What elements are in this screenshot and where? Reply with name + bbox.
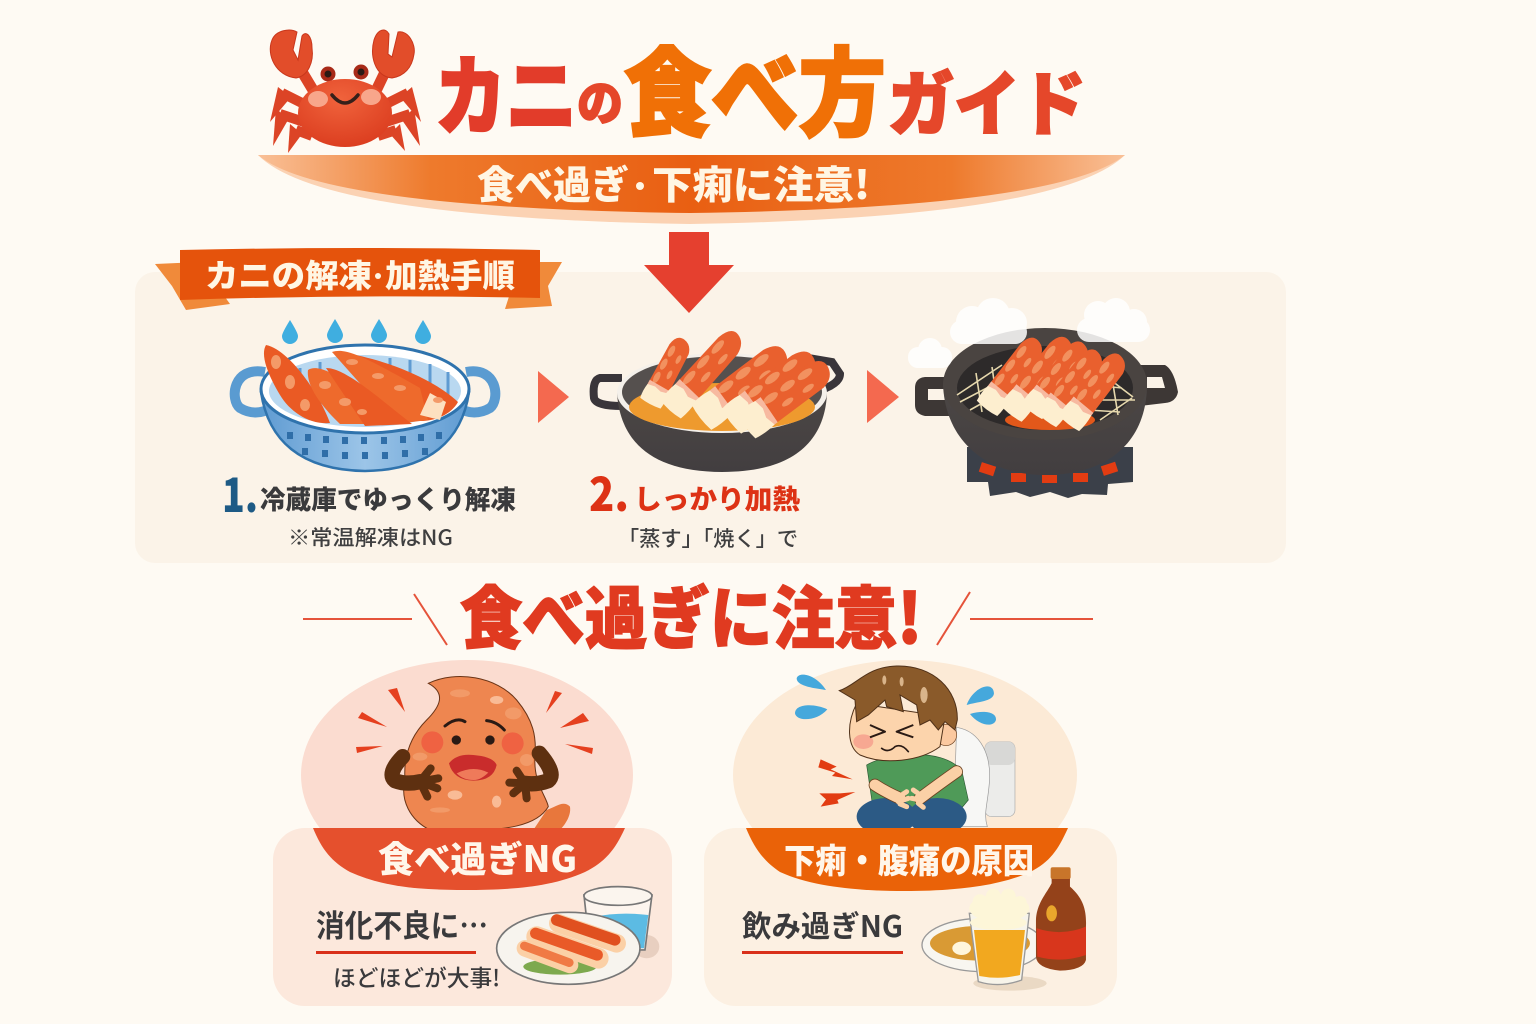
icon: grill on burner with steam: [908, 298, 1178, 498]
steam: [908, 298, 1150, 368]
overdrinking text: 飲み過ぎNG: [742, 902, 903, 946]
icon: crab mascot: [270, 30, 421, 153]
arms and hands: [392, 753, 551, 798]
card: [704, 828, 1117, 1006]
arrow: step 2 to 3: [867, 370, 899, 423]
red band: [313, 828, 625, 890]
ribbon text: カニの解凍: [205, 251, 372, 297]
band text: 食べ過ぎNG: [378, 831, 577, 883]
icon: surprise lines: [356, 688, 593, 754]
icon: sick crab character: [392, 677, 570, 830]
underline: [316, 951, 476, 954]
section heading: overeating warning: 食べ過ぎに注意!: [460, 564, 922, 663]
card: [273, 828, 672, 1006]
moderation text: ほどほどが大事!: [333, 959, 500, 993]
panel: diarrhea and stomach ache: [704, 660, 1117, 1006]
banner text: 下痢に注意!: [652, 155, 870, 211]
step 2 label: しっかり加熱: [634, 478, 800, 517]
step 2 label: [589, 459, 800, 525]
step 1 note: ※常温解凍はNG: [288, 522, 453, 552]
arrow: down: [644, 232, 734, 313]
panel: thawing and heating steps: [135, 272, 1286, 563]
circle backdrop: [301, 660, 633, 890]
arrow: step 1 to 2: [538, 371, 569, 423]
ribbon text: [205, 251, 515, 297]
title: [435, 17, 1086, 156]
indigestion text: 消化不良に…: [316, 901, 488, 946]
ribbon text: 加熱手順: [385, 251, 515, 297]
title: ガイド: [888, 49, 1086, 150]
icon: pot with crab legs: [594, 325, 840, 472]
step 1 label: 1.: [222, 460, 258, 526]
icon: colander with crab legs: [235, 345, 495, 471]
circle backdrop: [733, 660, 1077, 890]
step 2 note: 「蒸す」「焼く」で: [618, 523, 798, 553]
section heading: overeating warning: [303, 564, 1093, 663]
icon: beer, bottle and plate: [922, 867, 1086, 991]
panel: overeating: [273, 660, 672, 1006]
title: の: [577, 64, 623, 134]
step 1 label: 冷蔵庫でゆっくり解凍: [260, 480, 516, 517]
icon: plate with crab and water: [497, 887, 659, 984]
icon: water drops: [282, 319, 431, 344]
step 1 label: [222, 460, 516, 526]
orange band: [746, 828, 1068, 891]
step 2 label: 2.: [589, 459, 629, 525]
icon: boy with stomach ache on toilet: [795, 666, 1015, 835]
band text: 下痢・腹痛の原因: [784, 834, 1034, 883]
banner text: [477, 155, 870, 211]
ribbon heading: [155, 248, 562, 310]
banner text: 食べ過ぎ: [477, 155, 629, 211]
title: カニ: [435, 27, 577, 152]
title: 食べ方: [624, 17, 886, 156]
underline: [742, 951, 903, 954]
banner: [258, 155, 1125, 224]
